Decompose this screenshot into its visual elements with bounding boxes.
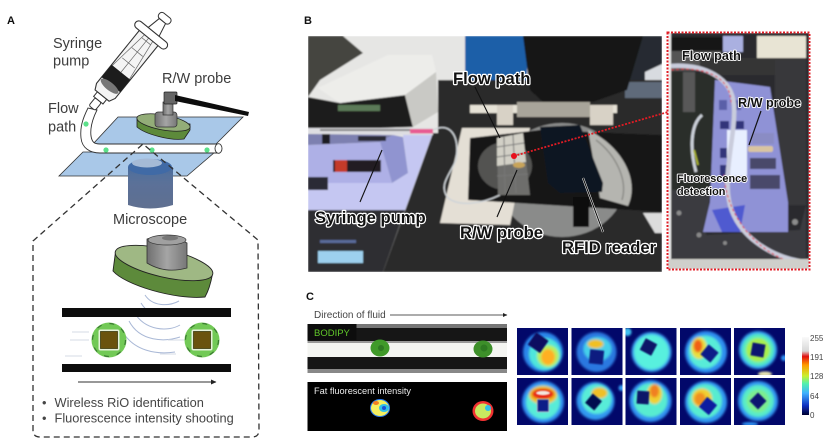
info screen [318,240,363,263]
label: flow path: Flow path [682,49,741,63]
RiO particle left [92,322,126,358]
icon: R/W probe over green disc [136,92,249,139]
RFID reader phone [540,125,603,193]
pump details [308,134,386,190]
panel label A: A [7,15,15,27]
white stage plate [440,128,530,225]
lavender table [308,135,432,210]
colour scale legend: 64 [810,392,819,401]
probe highlight [513,162,525,168]
instrument band [438,80,662,136]
heat tile row 2 col 1 [517,378,568,425]
syringe pump front [308,142,392,183]
stained particle right [474,340,492,358]
bullet list: • [42,410,46,426]
clamp bar [470,102,617,125]
inset background [668,33,809,269]
background wall [308,36,530,212]
right backdrop [628,36,662,82]
bottom strip [668,259,809,269]
heat tile row 2 col 4 [680,378,731,425]
lower glass plate [59,152,215,176]
icon: syringe [76,3,182,121]
lower-left base [308,210,405,272]
glowing chip [703,80,788,232]
label: syringe pump: Syringe pump [315,208,426,227]
clear dish lower part [512,122,618,238]
chip well plate [497,133,530,195]
dish crescent [588,130,632,206]
label: syringe pump: Syringe [53,36,102,52]
dashed callout outline [33,144,259,437]
dark corner [308,36,363,97]
controller box top [340,94,404,104]
tubing [433,128,500,203]
syringe rail [308,128,433,135]
blue backdrop [465,36,527,80]
left mechanism [671,71,716,190]
heat tile row 1 col 2 [572,328,622,375]
label: fluorescence detection: Fluorescence [677,173,747,185]
red dotted connector [511,112,668,159]
heat tile row 1 col 5 [734,328,787,376]
heat particle right [472,401,494,421]
pointer lines [360,87,603,232]
controller box side [405,72,438,127]
probe tip [748,146,773,152]
signal waves [124,295,180,353]
fat fluorescent intensity micrograph [308,382,507,431]
stained particle left [370,340,390,356]
colour scale legend: 128 [810,372,824,381]
panel A: experimental schematic [7,3,259,437]
caption: Fat fluorescent intensity [314,386,411,396]
label: R/W probe: R/W probe [162,71,231,87]
upper glass plate [93,117,243,144]
heat tile row 2 col 2 [572,378,624,425]
enlarged probe and disc [112,235,216,297]
motion streaks [65,332,186,356]
heat particle left [370,399,390,417]
direction of fluid heading: Direction of fluid [314,310,386,321]
heat tile row 1 col 1 [517,328,568,375]
label: syringe pump: pump [53,54,89,70]
panel B: photograph of setup [308,36,662,272]
channel walls [62,308,231,372]
cable [573,197,589,227]
bullet list: Wireless RiO identification [54,395,204,410]
BODIPY tag [308,324,356,340]
right dark part [775,74,806,205]
BODIPY tag: BODIPY [314,328,351,339]
inset dotted frame [668,32,810,270]
panel C label: C [306,291,314,303]
bullet list: • [42,395,46,410]
label: flow path: path [48,120,76,136]
label: flow path: Flow [48,101,79,117]
colour scale legend [802,334,824,420]
label: flow path: Flow path [453,69,530,88]
colour scale legend: 255 [810,334,824,343]
syringe pump top [308,134,393,145]
syringe pump side [380,135,408,183]
heat tile row 1 col 4 [680,328,731,375]
flow direction arrow [78,381,216,383]
label: RFID reader: RFID reader [562,238,657,257]
icon: microscope objective [128,158,173,208]
heat map grid [517,328,787,426]
flow path tube [81,108,222,153]
heat tile row 1 col 3 [624,328,676,375]
probe pointer [749,111,761,145]
BODIPY micrograph [308,324,507,373]
RiO particle right [184,322,220,358]
clear chip holder [478,142,532,190]
controller box front [308,95,413,130]
label: R/W probe: R/W probe [460,223,543,242]
label: fluorescence detection: detection [677,186,725,198]
microscope body [523,36,643,102]
bullet list: Fluorescence intensity shooting [54,410,234,426]
heat tile row 2 col 5 [734,378,785,426]
label: R/W probe: R/W probe [738,96,801,110]
colour scale legend: 0 [810,411,815,420]
black stage [468,130,662,212]
colour scale legend: 191 [810,353,824,362]
dark table [383,133,662,272]
label: microscope: Microscope [113,212,187,228]
heat tile row 2 col 3 [626,378,676,425]
lower plate [671,190,806,258]
panel B inset: close-up photograph [668,32,810,270]
flexible tube [671,66,806,262]
panel B label: B [304,15,312,27]
